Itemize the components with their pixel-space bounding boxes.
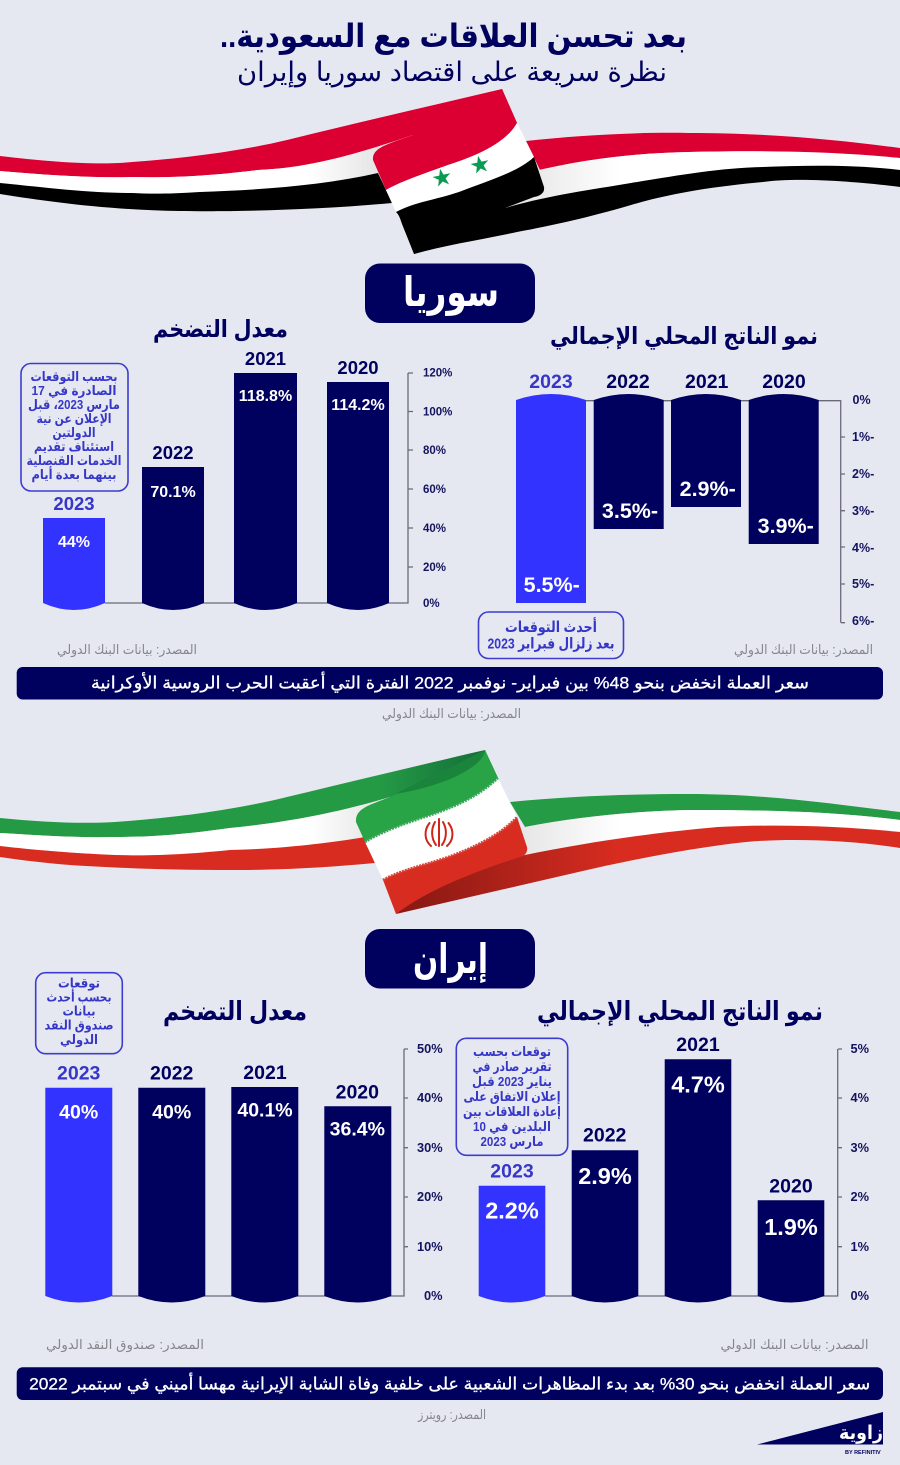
source: Syria inflation: المصدر: بيانات البنك الدولي xyxy=(57,642,197,658)
callout: Syria inflation forecast: الخدمات القنصلية xyxy=(26,453,122,468)
bar 2020: 2020 xyxy=(337,357,379,378)
subtitle: نظرة سريعة على اقتصاد سوريا وإيران xyxy=(237,57,667,88)
axis labels: 50% xyxy=(417,1041,443,1056)
axis labels: 1% xyxy=(850,1239,870,1254)
bar 2020: 2020 xyxy=(769,1175,813,1197)
bar 2022: 70.1% xyxy=(150,484,196,501)
Iran heading pill xyxy=(365,929,535,988)
bar 2020 xyxy=(327,357,389,610)
bar 2023: 5.5%- xyxy=(524,573,580,597)
callout: Syria inflation forecast: الدولتين xyxy=(52,425,96,440)
chart: Syria GDP growth xyxy=(516,371,874,628)
bar 2021 xyxy=(671,371,741,507)
bar 2023 xyxy=(479,1160,545,1302)
callout: Iran inflation forecast: بيانات xyxy=(62,1004,96,1019)
axis labels: 5% xyxy=(850,1041,870,1056)
callout: Iran GDP forecast: مارس 2023 xyxy=(480,1134,544,1149)
axis labels: 0% xyxy=(423,598,440,610)
bar 2020: 2020 xyxy=(762,371,806,393)
icon: star xyxy=(469,154,490,174)
bar 2020: 3.9%- xyxy=(758,514,814,538)
bar 2023: 2.2% xyxy=(485,1198,539,1224)
axis labels: 10% xyxy=(417,1239,443,1254)
bar 2020 xyxy=(749,371,819,544)
callout: Iran inflation forecast: صندوق النقد xyxy=(44,1018,114,1033)
callout: Iran inflation forecast xyxy=(36,973,122,1054)
bar 2022 xyxy=(594,371,664,529)
strip: Iran currency: سعر العملة انخفض بنحو 30% بعد بدء المظاهرات الشعبية على خلفية وفاة الشابة الإيرانية مهسا أميني في سبتمبر 2022 xyxy=(29,1372,870,1394)
axis labels: 40% xyxy=(423,523,446,535)
chart: Iran inflation xyxy=(45,1041,443,1303)
callout: Iran inflation forecast: بحسب أحدث xyxy=(46,989,112,1005)
bar 2021: 4.7% xyxy=(671,1072,725,1098)
source: Iran currency: المصدر: رويترز xyxy=(417,1407,486,1423)
axis labels: 30% xyxy=(417,1140,443,1155)
bar 2023: 2023 xyxy=(53,493,95,514)
callout: Syria inflation forecast: بحسب التوقعات xyxy=(30,369,118,384)
axis labels: 20% xyxy=(423,562,446,574)
bar 2022: 2022 xyxy=(606,371,650,393)
axis labels xyxy=(417,1041,443,1303)
chart: Iran GDP growth xyxy=(479,1034,870,1303)
callout: Iran GDP forecast: توقعات بحسب xyxy=(473,1044,551,1059)
callout: Syria GDP forecast xyxy=(478,612,624,658)
bar 2021 xyxy=(231,1062,298,1302)
heading: Iran inflation: معدل التضخم xyxy=(163,996,307,1026)
axis labels: 100% xyxy=(423,406,452,418)
axis labels: 3% xyxy=(850,1140,870,1155)
Iran heading pill: إيران xyxy=(413,936,488,984)
chart: Syria inflation xyxy=(43,348,452,610)
callout: Iran inflation forecast: توقعات xyxy=(58,976,100,990)
bar 2022: 2022 xyxy=(152,442,194,463)
axis labels: 0% xyxy=(424,1288,443,1303)
logo: Zawya by Refinitiv xyxy=(757,1412,883,1456)
bar 2023 xyxy=(45,1062,112,1302)
axis labels: 4%- xyxy=(852,541,874,555)
axis labels: 6%- xyxy=(852,614,874,628)
Iranian flag ribbon xyxy=(0,750,900,914)
heading: Syria GDP: نمو الناتج المحلي الإجمالي xyxy=(550,323,818,350)
source: Syria currency: المصدر: بيانات البنك الدولي xyxy=(382,706,521,722)
callout: Iran inflation forecast: الدولي xyxy=(60,1032,98,1047)
axis labels: 5%- xyxy=(852,577,874,591)
heading: Iran GDP: نمو الناتج المحلي الإجمالي xyxy=(537,996,823,1027)
bar 2022: 2.9% xyxy=(578,1163,632,1189)
axis labels: 20% xyxy=(417,1189,443,1204)
bar 2023: 2023 xyxy=(490,1160,534,1182)
bar 2023 xyxy=(43,493,105,610)
strip: Iran currency xyxy=(17,1367,883,1400)
source: Iran GDP: المصدر: بيانات البنك الدولي xyxy=(720,1337,868,1353)
bar 2021: 2021 xyxy=(245,348,286,369)
callout: Syria inflation forecast: مارس 2023، قبل xyxy=(28,397,120,412)
strip: Syria currency xyxy=(17,667,883,700)
bar 2021 xyxy=(665,1034,731,1302)
bar 2023: 2023 xyxy=(529,371,573,393)
callout: Syria inflation forecast: الصادرة في 17 xyxy=(31,383,116,398)
bar 2020 xyxy=(324,1081,391,1302)
bar 2020: 1.9% xyxy=(764,1214,818,1240)
bar 2021: 118.8% xyxy=(239,388,292,405)
bar 2020: 2020 xyxy=(336,1081,379,1103)
callout: Iran GDP forecast: يناير 2023 قبل xyxy=(472,1074,552,1089)
callout: Iran GDP forecast: إعلان الاتفاق على xyxy=(464,1089,560,1104)
axis labels: 1%- xyxy=(852,430,874,444)
source: Iran inflation: المصدر: صندوق النقد الدولي xyxy=(46,1337,204,1353)
axis labels: 40% xyxy=(417,1090,443,1105)
Syria heading pill: سوريا xyxy=(403,269,499,316)
heading: Syria inflation: معدل التضخم xyxy=(153,316,288,343)
icon: Iranian emblem xyxy=(426,819,452,846)
axis labels: 2% xyxy=(850,1189,870,1204)
axis labels: 120% xyxy=(423,368,452,380)
bar 2020 xyxy=(758,1175,824,1302)
bar 2023: 2023 xyxy=(57,1062,101,1084)
axis labels xyxy=(852,393,874,628)
Syrian flag ribbon xyxy=(0,89,900,254)
bar 2023 xyxy=(516,371,586,603)
bar 2022 xyxy=(138,1062,205,1302)
callout: Iran GDP forecast: البلدين في 10 xyxy=(473,1119,551,1134)
bar 2021 xyxy=(234,348,297,610)
bar 2022 xyxy=(142,442,204,610)
callout: Iran GDP forecast xyxy=(456,1038,568,1155)
bar 2022: 3.5%- xyxy=(602,499,658,523)
icon: star xyxy=(431,167,452,187)
bar 2022: 2022 xyxy=(150,1062,194,1084)
bar 2020: 114.2% xyxy=(331,397,385,414)
bar 2022: 2022 xyxy=(583,1125,627,1147)
logo: Zawya by Refinitiv: زاوية xyxy=(839,1423,883,1444)
logo: Zawya by Refinitiv: BY REFINITIV xyxy=(845,1450,881,1456)
bar 2021: 40.1% xyxy=(237,1100,293,1122)
source: Syria GDP: المصدر: بيانات البنك الدولي xyxy=(734,642,873,658)
callout: Iran GDP forecast: إعادة العلاقات بين xyxy=(463,1104,561,1119)
axis labels: 2%- xyxy=(852,467,874,481)
bar 2021: 2021 xyxy=(243,1062,287,1084)
bar 2020: 36.4% xyxy=(330,1119,385,1141)
axis labels: 0% xyxy=(852,393,871,407)
callout: Syria GDP forecast: أحدث التوقعات xyxy=(505,617,597,636)
axis labels: 0% xyxy=(850,1288,870,1303)
axis labels: 60% xyxy=(423,484,446,496)
bar 2022: 40% xyxy=(152,1101,191,1123)
bar 2021: 2.9%- xyxy=(680,477,736,501)
axis labels: 3%- xyxy=(852,504,874,518)
callout: Iran GDP forecast: تقرير صادر في xyxy=(472,1059,552,1074)
callout: Syria inflation forecast xyxy=(21,364,128,491)
bar 2023: 40% xyxy=(59,1101,98,1123)
axis labels xyxy=(850,1041,870,1303)
callout: Syria inflation forecast: استئناف تقديم xyxy=(34,439,114,454)
bar 2023: 44% xyxy=(58,534,90,551)
callout: Syria inflation forecast: الإعلان عن نية xyxy=(36,411,112,426)
Syria heading pill xyxy=(365,264,535,323)
callout: Syria inflation forecast: بينهما بعدة أيام xyxy=(32,466,116,483)
axis labels xyxy=(423,368,452,610)
callout: Syria GDP forecast: بعد زلزال فبراير 2023 xyxy=(488,636,614,652)
title: بعد تحسن العلاقات مع السعودية.. xyxy=(220,18,687,55)
bar 2021: 2021 xyxy=(676,1034,720,1056)
bar 2021: 2021 xyxy=(685,371,729,393)
axis labels: 4% xyxy=(850,1090,870,1105)
axis labels: 80% xyxy=(423,445,446,457)
strip: Syria currency: سعر العملة انخفض بنحو 48% بين فبراير- نوفمبر 2022 الفترة التي أعقبت الحرب الروسية الأوكرانية xyxy=(91,672,809,694)
bar 2022 xyxy=(572,1125,638,1302)
